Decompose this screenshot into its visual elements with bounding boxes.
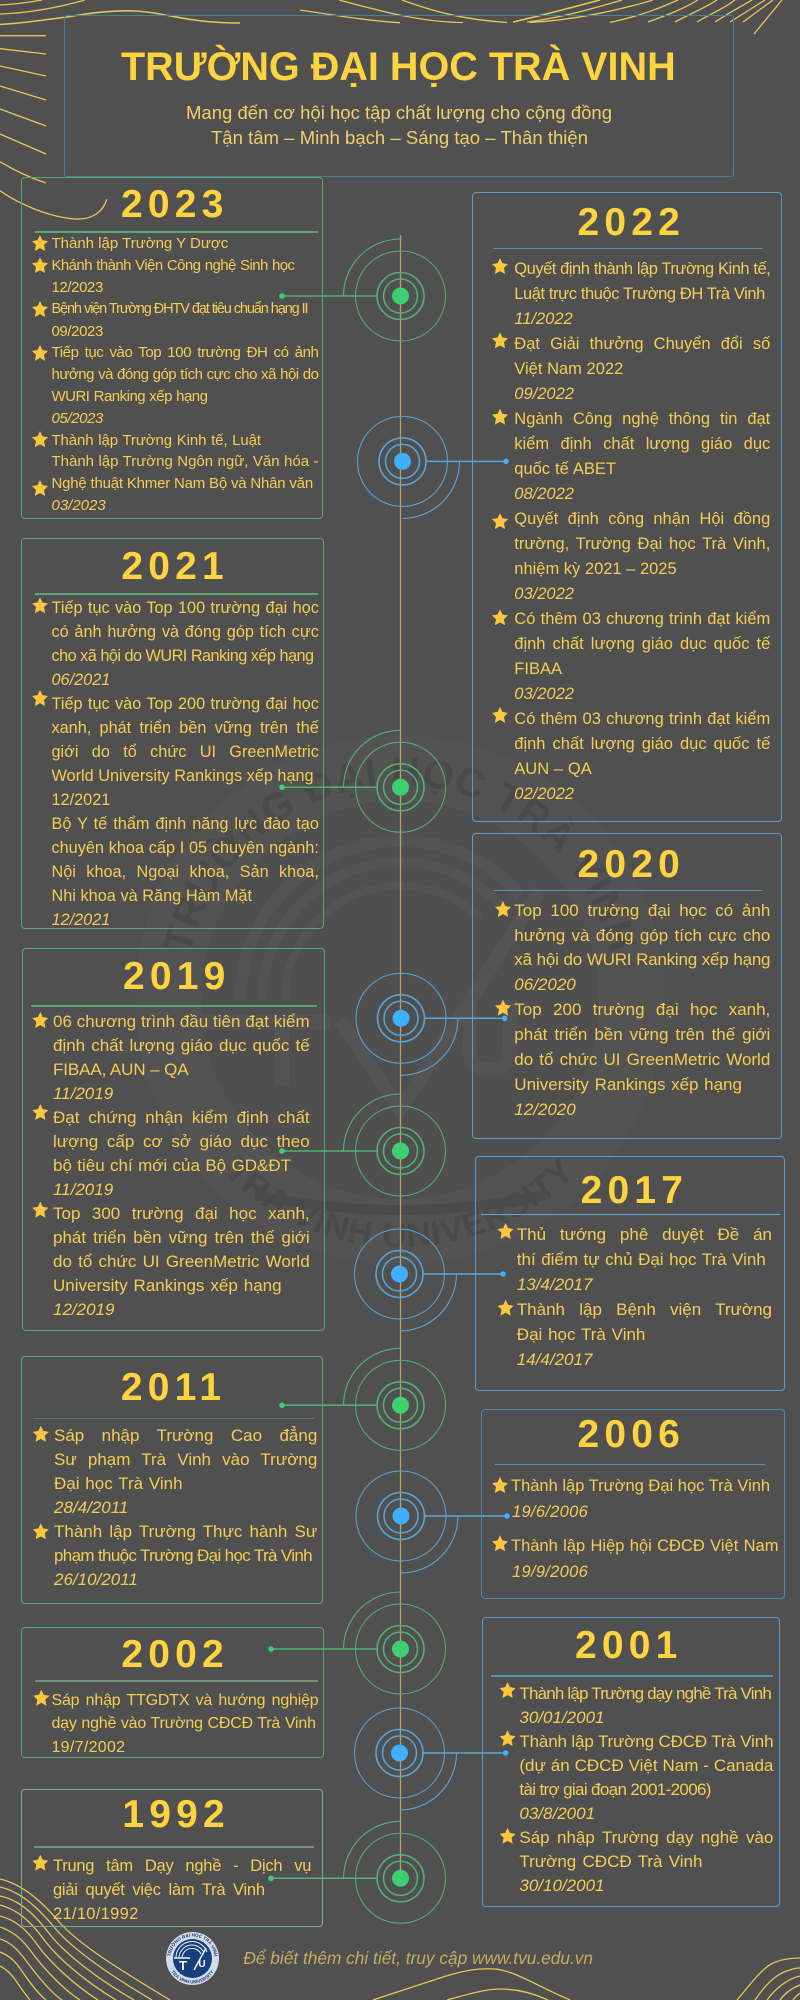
panel: 2020	[472, 833, 782, 1139]
milestone: Quyết định thành lập Trường Kinh tế,	[514, 260, 770, 278]
node: 2021	[279, 730, 446, 832]
milestone: Bệnh viện Trường ĐHTV đạt tiêu chuẩn hạng II	[51, 301, 307, 317]
milestone: 19/6/2006	[512, 1503, 588, 1521]
year heading: 2019: 2019	[123, 955, 231, 998]
milestone: World University Rankings xếp hạng	[51, 767, 314, 785]
milestone: FIBAA, AUN – QA	[53, 1060, 188, 1079]
milestone: Thành lập Bệnh viện Trường	[517, 1300, 772, 1319]
milestone: University Rankings xếp hạng	[514, 1075, 742, 1094]
milestone: Top 300 trường đại học xanh,	[53, 1204, 310, 1223]
milestone: xã hội do WURI Ranking xếp hạng	[514, 950, 770, 969]
milestone: 12/2020	[514, 1100, 576, 1119]
milestone: Luật trực thuộc Trường ĐH Trà Vinh	[514, 285, 765, 303]
year heading: 2021: 2021	[121, 545, 229, 588]
milestone	[498, 1223, 772, 1294]
milestone: 08/2022	[514, 485, 574, 503]
panel: 2019	[22, 948, 325, 1331]
milestone: Khánh thành Viện Công nghệ Sinh học	[51, 257, 294, 274]
footer note: Để biết thêm chi tiết, truy cập www.tvu.edu.vn	[243, 1948, 593, 1968]
milestones 2023	[32, 235, 318, 514]
milestone	[500, 1682, 771, 1727]
milestone	[492, 332, 770, 403]
year heading: 2023: 2023	[121, 183, 229, 226]
milestones 2022	[492, 258, 770, 803]
milestones 2006	[492, 1477, 778, 1581]
milestone: 11/2019	[53, 1180, 113, 1199]
node: 2020	[356, 973, 507, 1075]
milestone	[32, 1202, 310, 1319]
milestones 2020	[495, 901, 770, 1119]
year heading: 2020: 2020	[578, 843, 685, 886]
milestone: 06/2021	[51, 671, 110, 689]
milestone: kiểm định chất lượng giáo dục	[514, 435, 770, 453]
milestone: Đạt Giải thưởng Chuyển đổi số	[514, 335, 770, 353]
milestone	[32, 597, 319, 689]
milestone	[51, 815, 319, 929]
milestone	[492, 610, 770, 703]
milestone: Nghệ thuật Khmer Nam Bộ và Nhân văn	[51, 475, 313, 492]
milestones 2021	[32, 597, 319, 929]
milestone: có ảnh hưởng và đóng góp tích cực	[51, 623, 319, 641]
milestone: Quyết định công nhận Hội đồng	[514, 510, 770, 528]
milestone: 06 chương trình đầu tiên đạt kiểm	[53, 1012, 310, 1031]
node: 2019	[279, 1094, 446, 1196]
milestone	[32, 257, 295, 296]
milestone: Thành lập Hiệp hội CĐCĐ Việt Nam	[511, 1537, 778, 1555]
milestone: 09/2022	[514, 385, 574, 403]
title: TRƯỜNG ĐẠI HỌC TRÀ VINH	[121, 44, 676, 88]
milestone: do tổ chức UI GreenMetric World	[514, 1050, 770, 1069]
milestone: Tiếp tục vào Top 200 trường đại học	[51, 695, 319, 713]
watermark: university seal: TRƯỜNG ĐẠI HỌC TRÀ VINH	[164, 758, 636, 950]
milestone: Nội khoa, Ngoại khoa, Sản khoa,	[51, 863, 319, 881]
milestone	[33, 1426, 317, 1517]
milestones 1992	[32, 1855, 311, 1923]
milestone: 12/2021	[51, 791, 110, 809]
milestone: Thành lập Trường CĐCĐ Trà Vinh	[519, 1732, 773, 1751]
milestones 2017	[498, 1223, 772, 1369]
milestone: 11/2022	[514, 310, 573, 328]
milestone: Đại học Trà Vinh	[517, 1325, 645, 1344]
milestone: tài trợ giai đoạn 2001-2006)	[519, 1780, 711, 1799]
milestone	[500, 1828, 773, 1895]
milestone: xanh, phát triển bền vững trên thế	[51, 719, 319, 737]
footer logo: TRA VINH UNIVERSITY	[172, 1970, 213, 1984]
milestone	[33, 1690, 318, 1756]
milestone: 26/10/2011	[54, 1570, 138, 1589]
milestone: phát triển bền vững trên thế giới	[514, 1025, 770, 1044]
year heading: 2001: 2001	[575, 1624, 683, 1667]
milestone: Thành lập Trường Y Dược	[51, 235, 228, 252]
milestone: định chất lượng giáo dục quốc tế	[514, 735, 770, 753]
milestone: Tiếp tục vào Top 100 trường ĐH có ảnh	[51, 344, 318, 361]
milestone	[492, 258, 770, 328]
panel: header	[64, 14, 734, 176]
milestone: định chất lượng giáo dục quốc tế	[514, 635, 770, 653]
milestones 2001	[500, 1682, 774, 1895]
milestone: Thành lập Trường Đại học Trà Vinh	[511, 1477, 770, 1495]
milestone: cho xã hội do WURI Ranking xếp hạng	[51, 647, 313, 665]
milestone	[498, 1300, 772, 1369]
milestone: phạm thuộc Trường Đại học Trà Vinh	[54, 1546, 312, 1565]
year heading: 2017: 2017	[581, 1169, 688, 1212]
milestone: University Rankings xếp hạng	[53, 1276, 282, 1295]
milestone: dạy nghề vào Trường CĐCĐ Trà Vinh	[51, 1715, 316, 1732]
milestone: Đạt chứng nhận kiểm định chất	[53, 1108, 310, 1127]
milestone: Sáp nhập Trường Cao đẳng	[54, 1426, 317, 1445]
panel: 2023	[21, 177, 323, 519]
milestone: giải quyết việc làm Trà Vinh	[53, 1881, 265, 1899]
panel: 2021	[21, 538, 324, 929]
milestone: chuyên khoa cấp I 05 chuyên ngành:	[51, 839, 319, 857]
milestones 2019	[32, 1012, 310, 1319]
milestone: hưởng và đóng góp tích cực cho	[514, 926, 770, 945]
milestone: 03/8/2001	[519, 1804, 595, 1823]
node: 2023	[279, 239, 446, 341]
milestone: WURI Ranking xếp hạng	[51, 388, 207, 405]
milestone: 30/01/2001	[519, 1708, 604, 1727]
panel: 2001	[482, 1617, 780, 1907]
node: 2022	[358, 416, 509, 518]
milestone: 05/2023	[51, 410, 103, 427]
subtitle: Mang đến cơ hội học tập chất lượng cho cộng đồng	[186, 102, 612, 122]
milestone	[32, 344, 318, 427]
milestone: 03/2022	[514, 585, 574, 603]
milestone: FIBAA	[514, 660, 562, 678]
year heading: 2006: 2006	[577, 1413, 685, 1456]
milestone: 03/2022	[514, 685, 574, 703]
milestone	[492, 409, 770, 503]
milestone: Top 100 trường đại học có ảnh	[514, 901, 770, 920]
footer logo: U	[198, 1959, 206, 1970]
milestone	[492, 510, 770, 603]
panel: 2011	[21, 1356, 323, 1604]
milestone	[33, 1522, 317, 1589]
milestone: giới do tổ chức UI GreenMetric	[51, 743, 319, 761]
milestone: Có thêm 03 chương trình đạt kiểm	[514, 610, 770, 628]
panel: 2006	[481, 1409, 785, 1599]
milestone: Nhi khoa và Răng Hàm Mặt	[51, 887, 252, 905]
milestone	[492, 707, 770, 803]
milestone: Đại học Trà Vinh	[54, 1474, 183, 1493]
milestone	[32, 1104, 310, 1199]
watermark: university seal: TRA VINH UNIVERSITY	[230, 1157, 568, 1247]
milestone: nhiệm kỳ 2021 – 2025	[514, 560, 677, 578]
milestone: Sáp nhập TTGDTX và hướng nghiệp	[51, 1692, 318, 1709]
milestone	[492, 1477, 770, 1521]
milestone: 21/10/1992	[53, 1905, 139, 1923]
node: 1992	[268, 1821, 446, 1923]
milestone: Thủ tướng phê duyệt Đề án	[517, 1225, 772, 1244]
milestone	[32, 1855, 311, 1923]
milestone: 11/2019	[53, 1084, 113, 1103]
milestone: Trung tâm Dạy nghề - Dịch vụ	[53, 1857, 311, 1875]
milestone	[32, 690, 319, 809]
milestone: 12/2019	[53, 1300, 114, 1319]
milestone: Tiếp tục vào Top 100 trường đại học	[51, 599, 319, 617]
milestone: 12/2023	[51, 279, 103, 296]
milestone	[492, 1535, 778, 1581]
milestone: Thành lập Trường Thực hành Sư	[54, 1522, 317, 1541]
node: 2002	[268, 1592, 446, 1694]
milestone: Việt Nam 2022	[514, 360, 623, 378]
node: 2017	[354, 1229, 506, 1331]
milestone: Sáp nhập Trường dạy nghề vào	[519, 1828, 773, 1847]
milestone: 02/2022	[514, 785, 574, 803]
milestone: Ngành Công nghệ thông tin đạt	[514, 410, 770, 428]
milestone	[32, 453, 318, 514]
panel: 2022	[472, 192, 782, 822]
milestone: định chất lượng giáo dục quốc tế	[53, 1036, 310, 1055]
year heading: 1992: 1992	[122, 1793, 230, 1836]
year heading: 2022: 2022	[577, 201, 685, 244]
milestone: Thành lập Trường dạy nghề Trà Vinh	[519, 1684, 771, 1703]
milestone: quốc tế ABET	[514, 460, 616, 478]
milestone: Có thêm 03 chương trình đạt kiểm	[514, 710, 770, 728]
milestone	[495, 901, 770, 994]
milestone: 12/2021	[51, 911, 110, 929]
milestone: 19/9/2006	[512, 1563, 588, 1581]
milestone: lượng cấp cơ sở giáo dục theo	[53, 1132, 310, 1151]
milestone: Trường CĐCĐ Trà Vinh	[519, 1852, 702, 1871]
values line: Tận tâm – Minh bạch – Sáng tạo – Thân thiện	[211, 127, 588, 148]
footer logo	[166, 1932, 219, 1985]
footer logo: TRƯỜNG ĐẠI HỌC TRÀ VINH	[167, 1933, 218, 1956]
milestone: 13/4/2017	[517, 1275, 592, 1294]
milestone	[495, 1000, 770, 1119]
milestone: (dự án CĐCĐ Việt Nam - Canada	[519, 1756, 773, 1775]
node: 2001	[354, 1708, 508, 1810]
milestones 2011	[33, 1426, 317, 1589]
panel: 2002	[21, 1627, 324, 1758]
milestone: 14/4/2017	[517, 1350, 592, 1369]
milestone: 03/2023	[51, 497, 106, 514]
milestone: trường, Trường Đại học Trà Vinh,	[514, 535, 770, 553]
milestone: Thành lập Trường Ngôn ngữ, Văn hóa -	[51, 453, 318, 470]
panel: 1992	[21, 1789, 323, 1927]
milestone: bộ tiêu chí mới của Bộ GD&ĐT	[53, 1156, 291, 1175]
milestone: 30/10/2001	[519, 1876, 604, 1895]
milestone: Bộ Y tế thẩm định năng lực đào tạo	[51, 815, 319, 833]
node: 2006	[356, 1471, 510, 1573]
milestone: hưởng và đóng góp tích cực cho xã hội do	[51, 366, 318, 383]
milestone: 28/4/2011	[54, 1498, 128, 1517]
milestone: 19/7/2002	[51, 1739, 125, 1756]
year heading: 2011: 2011	[121, 1366, 226, 1408]
milestone: Top 200 trường đại học xanh,	[514, 1000, 770, 1019]
milestone: Thành lập Trường Kinh tế, Luật	[51, 432, 261, 449]
milestone: thí điểm tự chủ Đại học Trà Vinh	[517, 1250, 766, 1269]
milestone: Sư phạm Trà Vinh vào Trường	[54, 1450, 317, 1469]
milestone	[500, 1730, 774, 1823]
milestone: phát triển bền vững trên thế giới	[53, 1228, 310, 1247]
footer logo: T	[179, 1958, 187, 1973]
milestone	[32, 301, 308, 340]
milestone: 06/2020	[514, 975, 576, 994]
milestone: AUN – QA	[514, 760, 592, 778]
year heading: 2002: 2002	[121, 1633, 229, 1676]
milestone	[32, 1012, 310, 1103]
milestone: 09/2023	[51, 323, 103, 340]
panel: 2017	[474, 1156, 785, 1391]
milestones 2002	[33, 1690, 318, 1756]
node: 2011	[279, 1348, 446, 1450]
milestone: do tổ chức UI GreenMetric World	[53, 1252, 310, 1271]
